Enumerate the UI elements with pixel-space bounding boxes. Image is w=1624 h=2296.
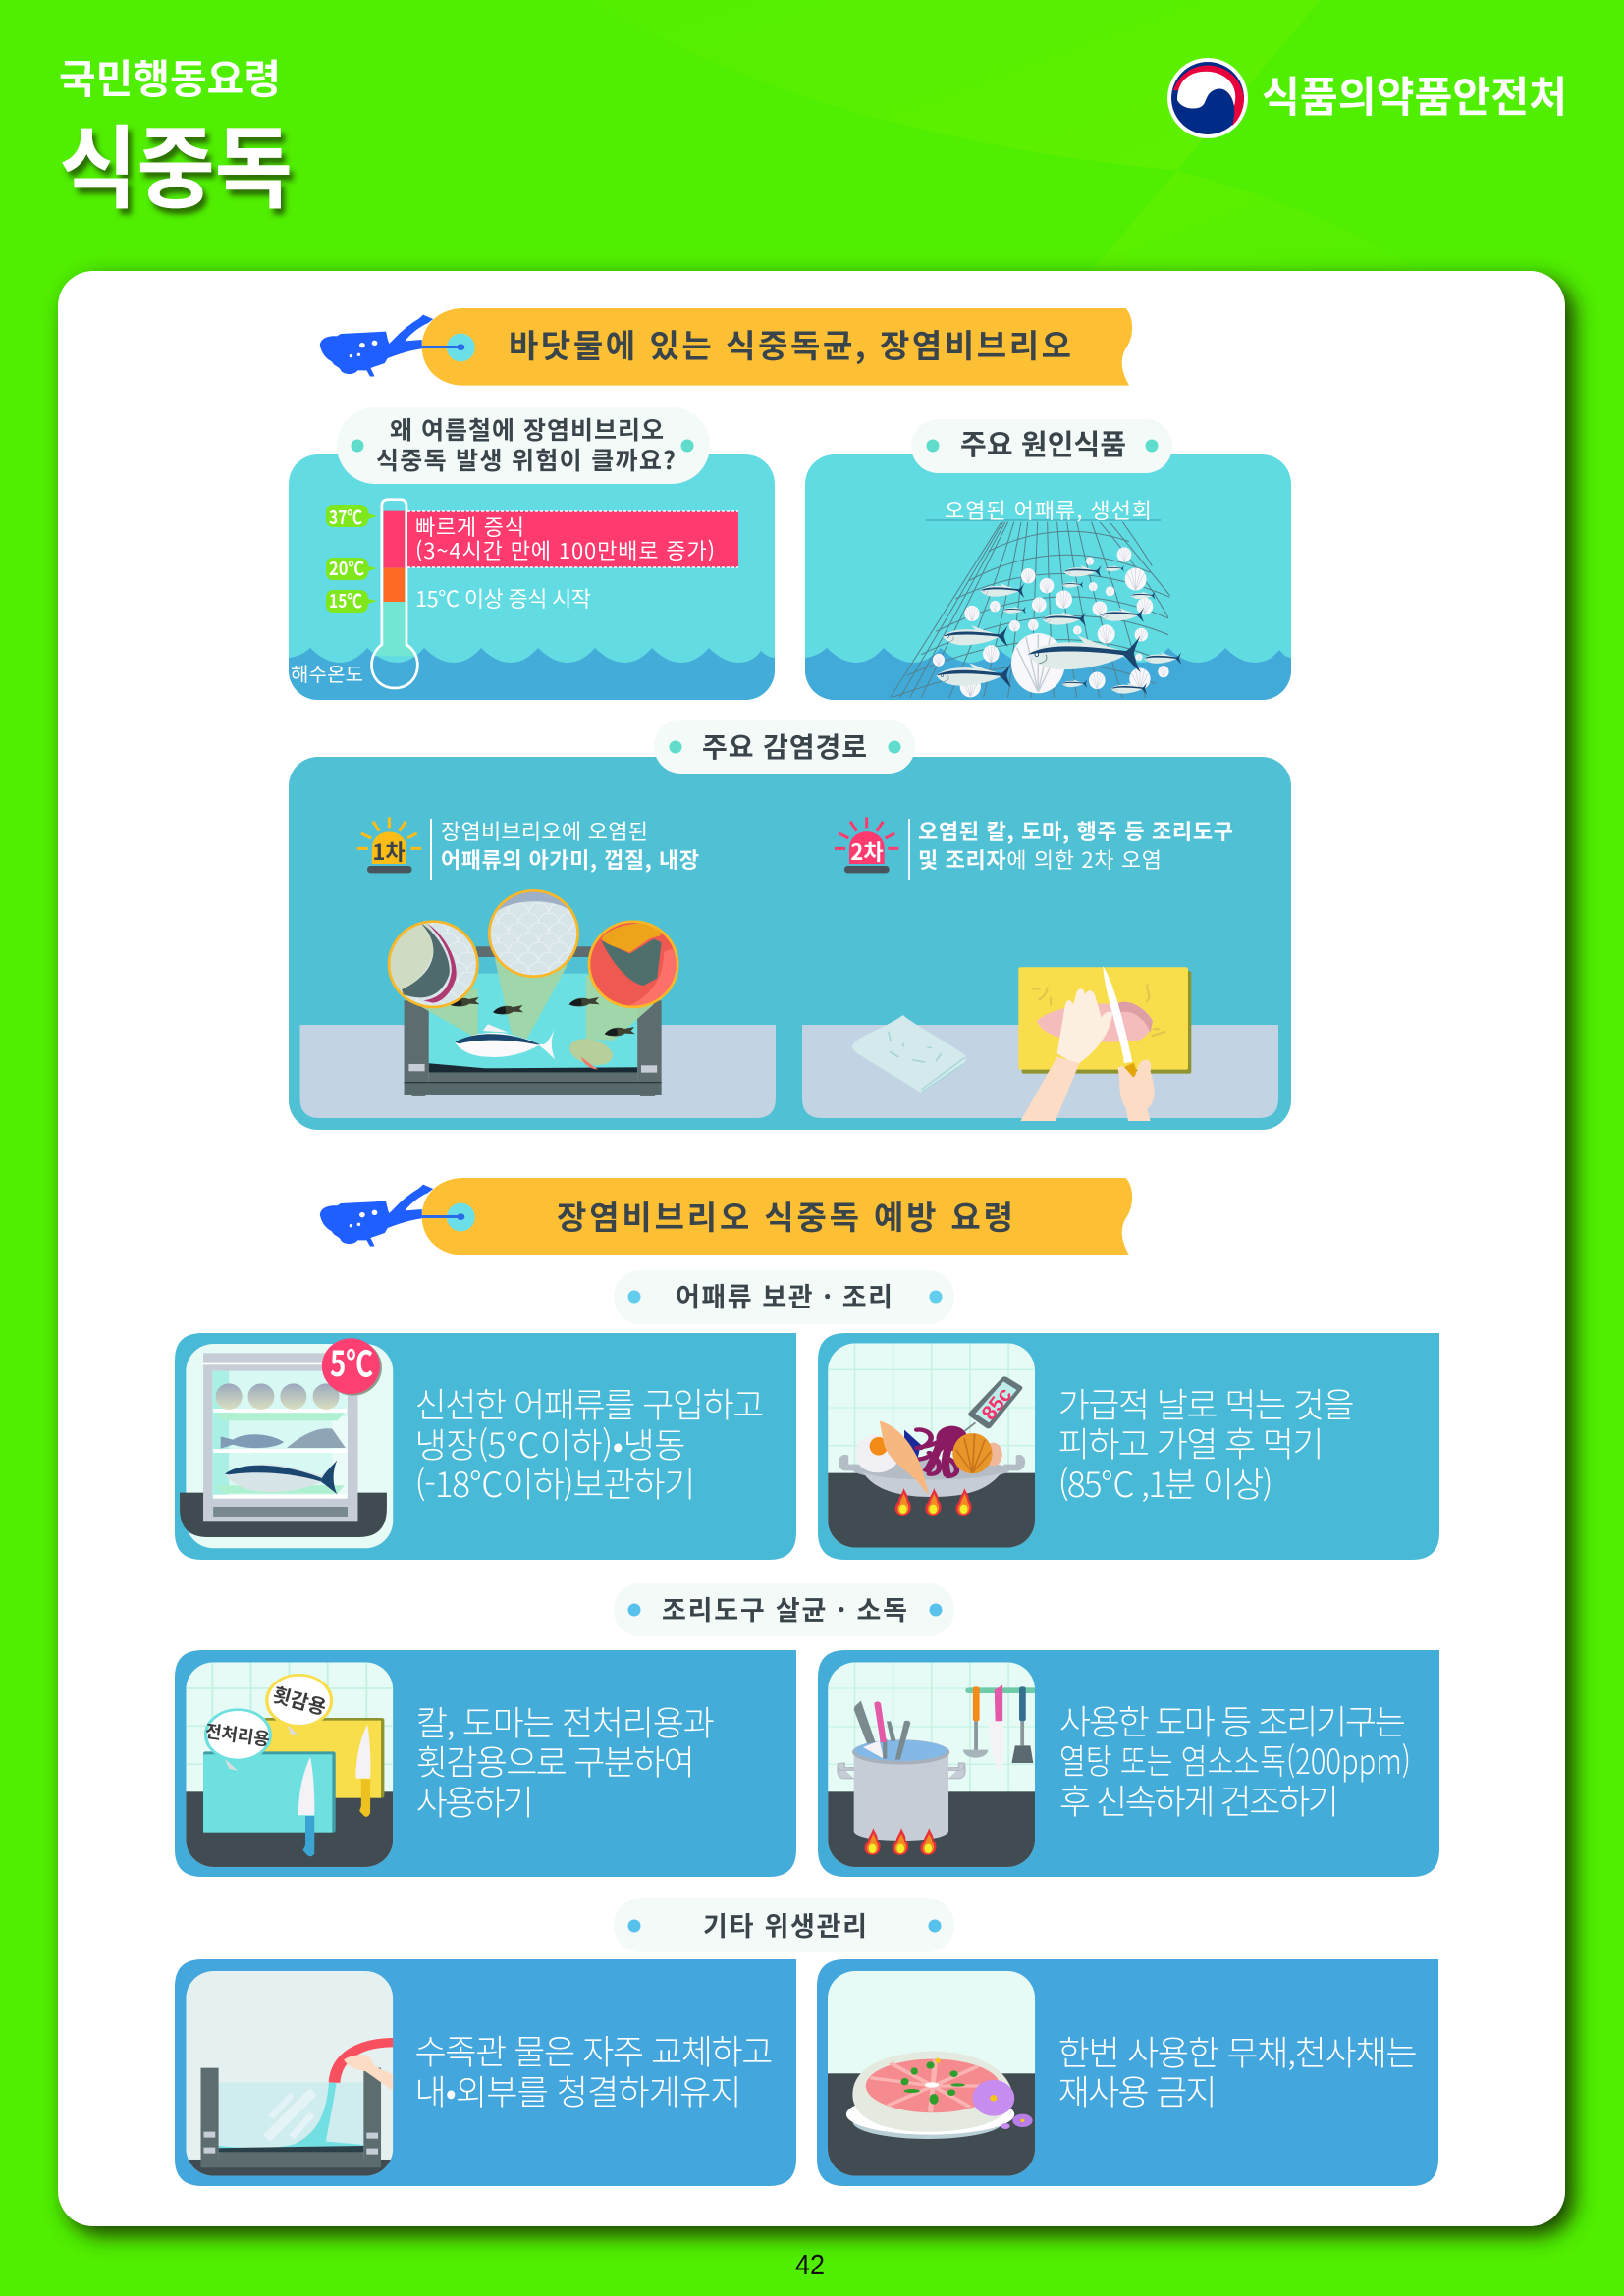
card: change aquarium water — [175, 1959, 796, 2186]
card text: 신선한 어패류를 구입하고 — [414, 1378, 764, 1428]
pill heading: tool sterilization — [614, 1583, 954, 1636]
card text: 한번 사용한 무채,천사채는 — [1058, 2026, 1418, 2076]
illustration: aquarium with magnified fish parts — [387, 890, 680, 1096]
card: do not reuse radish garnish — [817, 1959, 1438, 2186]
pill heading: other hygiene — [614, 1898, 954, 1952]
thermometer — [371, 500, 417, 688]
card text: 재사용 금지 — [1058, 2065, 1218, 2115]
ministry name: 식품의약품안전처 — [1262, 64, 1567, 125]
card: sanitize and dry tools — [818, 1650, 1439, 1877]
pill heading: seafood storage — [614, 1270, 954, 1324]
label: 20 degrees: 20℃ — [329, 555, 364, 581]
illustration: seafood in pan over flames — [828, 1343, 1035, 1548]
card text — [414, 2025, 774, 2115]
panel: infection routes — [289, 720, 1291, 1130]
card text: 수족관 물은 자주 교체하고 — [414, 2025, 774, 2075]
logo: ministry emblem and name — [1167, 58, 1567, 138]
card text: 사용한 도마 등 조리기구는 — [1059, 1695, 1406, 1745]
card text — [414, 1378, 764, 1508]
bubble label: for raw fish: 횟감용 — [270, 1683, 329, 1720]
card text: 횟감용으로 구분하여 — [416, 1735, 695, 1786]
route 1 heading: 어패류의 아가미, 껍질, 내장 — [441, 843, 699, 875]
red fast growth bar — [407, 510, 738, 567]
pill heading: other hygiene: 기타 위생관리 — [703, 1905, 867, 1944]
illustration: sashimi plate with garnish — [828, 1971, 1035, 2176]
card text: 열탕 또는 염소소독(200ppm) — [1059, 1735, 1411, 1785]
panel background — [289, 757, 1291, 1130]
banner: section 2 heading: 장염비브리오 식중독 예방 요령 — [557, 1192, 1013, 1239]
card text — [1059, 1695, 1411, 1825]
pill heading: why summer: 식중독 발생 위험이 클까요? — [376, 442, 676, 477]
illustration: net with fish and shells — [891, 522, 1181, 698]
card text: 피하고 가열 후 먹기 — [1058, 1417, 1325, 1468]
pill heading: tool sterilization: 조리도구 살균 · 소독 — [662, 1589, 907, 1628]
note: growth starts at 15 degrees: 15℃ 이상 증식 시작 — [415, 582, 591, 614]
pill heading: main foods — [911, 419, 1172, 473]
panel background and sea — [289, 454, 775, 700]
card: cook thoroughly — [818, 1333, 1439, 1560]
banner: section 1 heading — [320, 308, 1132, 386]
pill heading: seafood storage: 어패류 보관 · 조리 — [676, 1276, 893, 1314]
bubble label: for preparation: 전처리용 — [204, 1721, 271, 1750]
route 1 heading: 장염비브리오에 오염된 — [441, 815, 648, 846]
pill heading: main foods: 주요 원인식품 — [960, 422, 1126, 463]
counter surfaces — [300, 1025, 1278, 1118]
illustration: aquarium being filled by hose — [186, 1971, 394, 2176]
card text — [1058, 1378, 1355, 1508]
card text: 사용하기 — [416, 1776, 534, 1826]
temperature badge: 5℃ — [330, 1336, 373, 1387]
illustration: refrigerated display — [180, 1338, 393, 1548]
icon: pink siren 2nd — [835, 817, 898, 873]
food caption with underline: 오염된 어패류, 생선회 — [945, 494, 1152, 525]
illustration: cutting boards and knives — [186, 1662, 393, 1867]
pill heading: why summer: 왜 여름철에 장염비브리오 — [390, 411, 664, 447]
axis label: sea temperature: 해수온도 — [291, 659, 363, 687]
card: separate knives and cutting boards — [175, 1650, 796, 1877]
route 1 heading — [357, 815, 699, 880]
card text: 후 신속하게 건조하기 — [1059, 1775, 1339, 1825]
page number: 42 — [795, 2250, 825, 2281]
card text: 가급적 날로 먹는 것을 — [1058, 1378, 1355, 1428]
pill heading: why summer — [337, 407, 710, 484]
card text: 냉장(5℃이하)•냉동 — [414, 1418, 685, 1468]
icon: pink siren 2nd: 2차 — [850, 835, 884, 867]
red fast growth bar: 빠르게 증식 — [415, 510, 524, 542]
card text: 칼, 도마는 전처리용과 — [416, 1696, 715, 1746]
card text — [1058, 2026, 1418, 2115]
illustration: towel, board, hands — [852, 966, 1191, 1121]
card text: (-18℃이하)보관하기 — [414, 1458, 695, 1508]
panel background and sea — [805, 454, 1291, 700]
route 2 heading: 및 조리자에 의한 2차 오염 — [918, 843, 1162, 875]
thermometer reading: 85c — [978, 1383, 1016, 1424]
card text: 내•외부를 청결하게유지 — [414, 2065, 742, 2115]
banner: section 2 heading — [320, 1178, 1132, 1255]
panel: main causal foods — [805, 419, 1291, 700]
banner: section 1 heading: 바닷물에 있는 식중독균, 장염비브리오 — [509, 320, 1071, 367]
label: 15 degrees: 15℃ — [329, 587, 362, 614]
pill heading: infection routes — [654, 720, 915, 774]
route 2 heading — [835, 815, 1233, 880]
pill heading: infection routes: 주요 감염경로 — [702, 726, 867, 766]
red fast growth bar: (3~4시간 만에 100만배로 증가) — [415, 534, 715, 565]
header subtitle: 국민행동요령 — [59, 46, 281, 105]
route 2 heading: 오염된 칼, 도마, 행주 등 조리도구 — [918, 815, 1233, 846]
white main card — [58, 271, 1565, 2226]
card text — [416, 1696, 715, 1826]
card: buy fresh seafood and refrigerate — [175, 1333, 796, 1560]
icon: taegeuk emblem — [1167, 58, 1248, 138]
icon: yellow siren 1st: 1차 — [372, 835, 406, 867]
lenses — [390, 923, 476, 1006]
label: 37 degrees: 37℃ — [329, 504, 362, 530]
main title: 식중독 — [59, 96, 293, 227]
panel: sea temperature — [289, 407, 775, 700]
illustration: pot with boiling utensils — [828, 1662, 1038, 1867]
icon: yellow siren 1st — [357, 817, 421, 873]
card text: (85℃ ,1분 이상) — [1058, 1458, 1273, 1508]
